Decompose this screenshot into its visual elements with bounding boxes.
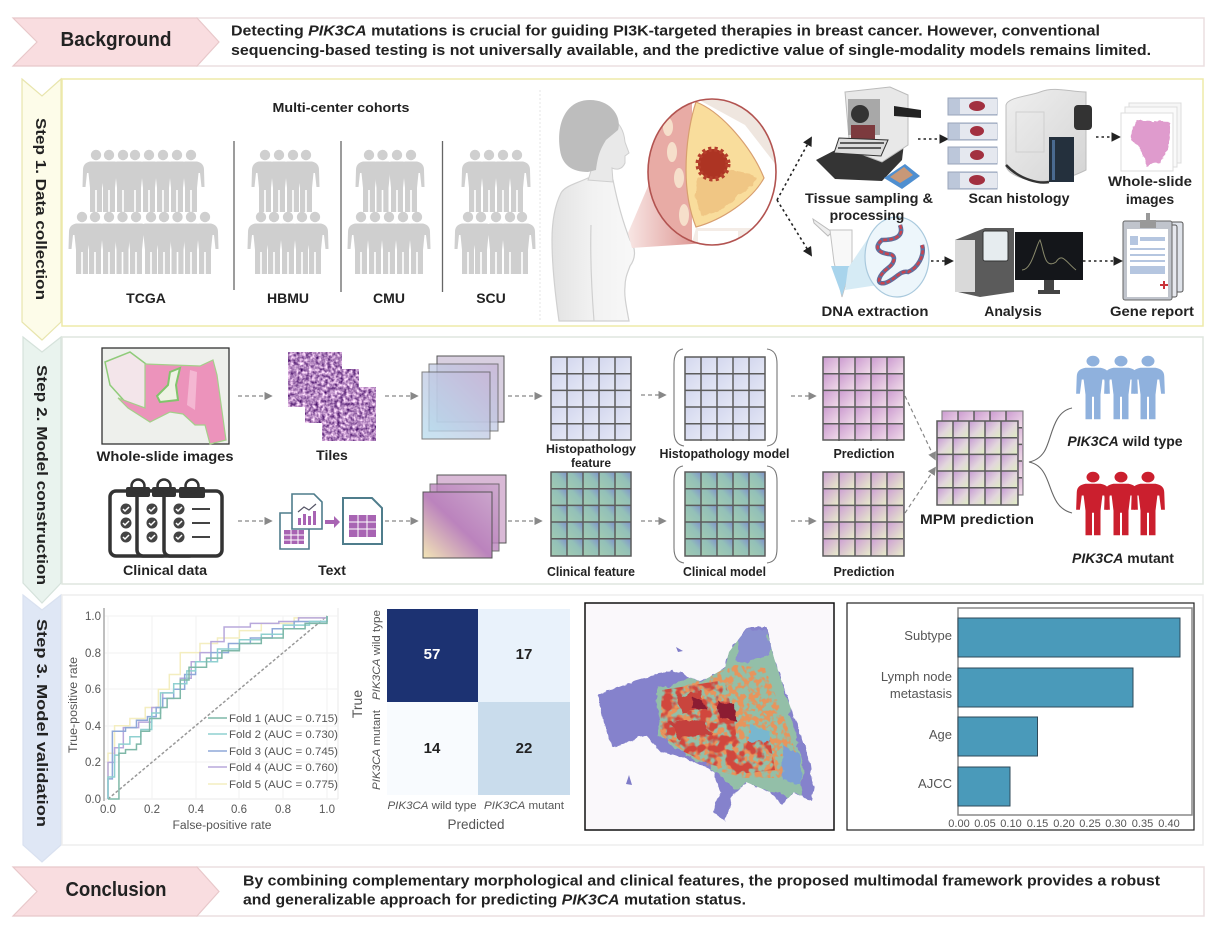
- step 2 tab: [23, 337, 61, 603]
- panel: step 2 model construction: [62, 337, 1203, 584]
- step 1 process labels: DNA extraction: [822, 303, 928, 319]
- ROC legend: Fold 4 (AUC = 0.760): [229, 762, 338, 774]
- ROC axis labels: 0.6: [85, 684, 101, 696]
- step 2 grid labels: Histopathology: [546, 442, 636, 456]
- step 2 grid labels: Clinical model: [683, 565, 766, 579]
- ROC axis labels: [68, 611, 335, 832]
- icon: slide scanner: [1006, 89, 1092, 182]
- grid: clinical prediction: [823, 472, 904, 556]
- cohort: TCGA: TCGA: [126, 290, 166, 306]
- icon: gene report clipboards: [1123, 213, 1183, 300]
- ROC axis labels: 0.0: [100, 804, 116, 816]
- ROC axis labels: 0.8: [275, 804, 291, 816]
- icon: PIK3CA wild type group: PIK3CA wild type: [1067, 433, 1183, 449]
- cohort: CMU: [348, 150, 430, 306]
- feature importance bar chart: 0.00: [948, 818, 970, 830]
- confusion matrix: 57: [424, 646, 440, 663]
- ROC legend: Fold 5 (AUC = 0.775): [229, 779, 338, 791]
- heading: multi-center cohorts: Multi-center cohorts: [272, 100, 410, 115]
- feature importance bar chart: Lymph node: [881, 669, 952, 684]
- confusion matrix: [349, 609, 570, 832]
- icon: breast cross-section with tumor: [628, 95, 780, 250]
- model brackets: [674, 349, 777, 563]
- confusion matrix: PIK3CA wild type: [388, 800, 476, 812]
- background text: Detecting PIK3CA mutations is crucial for guiding PI3K-targeted therapies in breast cancer. However, conventional: [231, 22, 1100, 40]
- grid: histopathology prediction: [823, 357, 904, 441]
- icon: whole-slide image stack: [1121, 103, 1181, 171]
- grid: clinical model: [685, 472, 765, 556]
- feature importance bar chart: 0.10: [1000, 818, 1022, 830]
- icon: text conversion documents: Text: [318, 562, 346, 578]
- panel: step 1 data collection: [62, 79, 1203, 326]
- conclusion arrow label: Conclusion: [66, 879, 166, 901]
- conclusion text: [243, 872, 1160, 908]
- feature importance bar chart: 0.05: [974, 818, 996, 830]
- conclusion banner: [13, 867, 1204, 916]
- ROC axis labels: 0.6: [231, 804, 247, 816]
- arrows: dotted branch to processing paths: [777, 137, 1121, 261]
- panel: step 3 model validation: [62, 595, 1203, 845]
- icon: clinical clipboards: [110, 480, 222, 578]
- background text: [231, 22, 1151, 59]
- ROC legend: Fold 1 (AUC = 0.715): [229, 713, 338, 725]
- icon: tissue slides: [948, 98, 997, 189]
- confusion matrix: 22: [516, 740, 532, 757]
- whole-slide image: [96, 348, 234, 464]
- step 2 grid labels: [546, 442, 895, 579]
- conclusion text: By combining complementary morphological and clinical features, the proposed multimodal framework provides a robust: [243, 872, 1160, 890]
- icon: DNA magnified circle: [845, 217, 929, 297]
- ROC axis labels: 0.4: [188, 804, 205, 816]
- step 1 process labels: Scan histology: [968, 190, 1070, 206]
- step 2 grid labels: Histopathology model: [660, 447, 790, 461]
- confusion matrix: PIK3CA mutant: [484, 800, 564, 812]
- confusion matrix: Predicted: [448, 816, 504, 832]
- ROC axis labels: 0.8: [85, 648, 101, 660]
- confusion matrix: 14: [424, 740, 441, 757]
- grid: clinical feature: [551, 472, 631, 556]
- brace to outcomes: [1029, 408, 1072, 513]
- ROC axis labels: 0.0: [85, 794, 101, 806]
- ROC legend: Fold 2 (AUC = 0.730): [229, 729, 338, 741]
- ROC axis labels: 0.2: [85, 757, 101, 769]
- icon: PIK3CA wild type group: [1067, 356, 1183, 449]
- cohort: HBMU: [248, 150, 328, 306]
- step 1 process labels: Gene report: [1110, 303, 1194, 319]
- icon: microcentrifuge tube: [813, 219, 852, 297]
- ROC chart: [68, 608, 338, 832]
- feature importance bar chart: 0.30: [1105, 818, 1127, 830]
- step 1 tab: [22, 79, 61, 340]
- icon: PIK3CA mutant group: [1072, 472, 1174, 566]
- feature importance bar chart: [847, 603, 1194, 830]
- cohort dividers: [234, 141, 442, 292]
- icon: woman figure: [552, 100, 634, 321]
- step 1 process labels: [805, 173, 1194, 319]
- grid: histopathology feature: [551, 357, 631, 441]
- feature importance bar chart: 0.35: [1132, 818, 1153, 830]
- whole-slide image: Whole-slide images: [96, 448, 234, 464]
- tiles: Tiles: [316, 447, 348, 463]
- step 1 tab: Step 1. Data collection: [32, 118, 49, 300]
- step 2 grid labels: Prediction: [833, 565, 895, 579]
- background text: sequencing-based testing is not universally available, and the predictive value of single-modality models remains limited.: [231, 42, 1151, 59]
- cohort: SCU: [454, 150, 536, 306]
- confusion matrix: PIK3CA mutant: [371, 710, 383, 790]
- step 2 grid labels: feature: [571, 456, 611, 470]
- feature importance bar chart: Subtype: [904, 628, 952, 643]
- ROC axis labels: 0.4: [85, 721, 102, 733]
- step 1 process labels: images: [1126, 191, 1174, 207]
- conclusion arrow label: [13, 867, 219, 916]
- feature importance bar chart: 0.40: [1158, 818, 1180, 830]
- ROC axis labels: True-positive rate: [68, 657, 80, 753]
- ROC axis labels: 1.0: [85, 611, 101, 623]
- cohort: HBMU: HBMU: [267, 290, 309, 306]
- step 3 tab: Step 3. Model validation: [33, 619, 50, 827]
- cohort: TCGA: [68, 150, 218, 306]
- background arrow label: Background: [60, 29, 172, 51]
- step 2 grid labels: Prediction: [833, 447, 895, 461]
- cohort: CMU: CMU: [373, 290, 405, 306]
- feature importance bar chart: 0.25: [1079, 818, 1101, 830]
- dashed flow arrows: [238, 395, 935, 521]
- step 2 grid labels: Clinical feature: [547, 565, 635, 579]
- feature importance bar chart: 0.15: [1027, 818, 1048, 830]
- step 1 process labels: Analysis: [984, 303, 1042, 319]
- icon: clinical clipboards: Clinical data: [123, 562, 207, 578]
- confusion matrix: PIK3CA wild type: [371, 610, 383, 700]
- step 2 tab: Step 2. Model construction: [33, 365, 50, 585]
- background arrow label: [13, 18, 219, 66]
- icon: text conversion documents: [280, 494, 382, 578]
- step 1 process labels: Whole-slide: [1108, 173, 1192, 189]
- ROC axis labels: 0.2: [144, 804, 160, 816]
- step 1 process labels: Tissue sampling &: [805, 190, 933, 206]
- tiles: [288, 352, 376, 463]
- feature importance bar chart: metastasis: [890, 686, 952, 701]
- MPM prediction stack: MPM prediction: [920, 511, 1034, 527]
- step 1 process labels: processing: [830, 207, 904, 223]
- feature importance bar chart: 0.20: [1053, 818, 1075, 830]
- ROC axis labels: False-positive rate: [172, 820, 272, 832]
- confusion matrix: True: [349, 690, 365, 718]
- background banner: [13, 18, 1204, 66]
- cohort: SCU: SCU: [476, 290, 506, 306]
- ROC axis labels: 1.0: [319, 804, 335, 816]
- MPM prediction stack: [920, 411, 1034, 527]
- icon: sequencer and monitor: [955, 228, 1083, 297]
- conclusion text: and generalizable approach for predicting PIK3CA mutation status.: [243, 892, 746, 908]
- ROC legend: Fold 3 (AUC = 0.745): [229, 746, 338, 758]
- confusion matrix: 17: [516, 646, 532, 663]
- icon: microtome: [816, 87, 921, 189]
- stacked feature maps: clinical: [423, 475, 506, 558]
- feature importance bar chart: AJCC: [918, 776, 952, 791]
- stacked feature maps: histology: [422, 356, 504, 439]
- feature importance bar chart: Age: [929, 727, 952, 742]
- ROC legend: [208, 713, 338, 791]
- icon: PIK3CA mutant group: PIK3CA mutant: [1072, 550, 1174, 566]
- spatial heatmap: [585, 603, 834, 830]
- grid: histopathology model: [685, 357, 765, 441]
- step 3 tab: [23, 595, 61, 862]
